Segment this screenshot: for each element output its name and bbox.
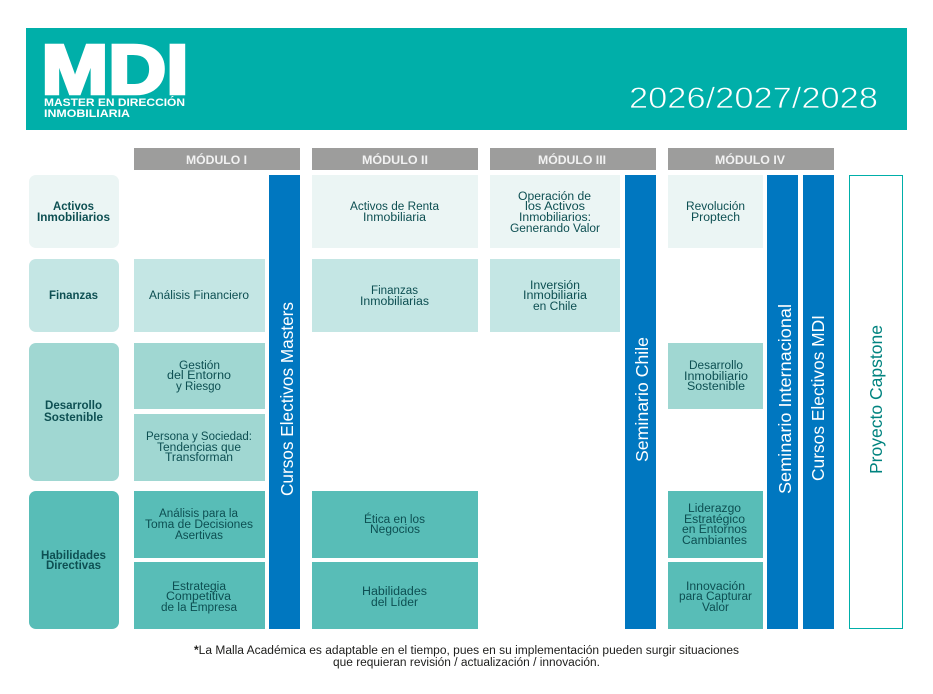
header banner bbox=[26, 28, 907, 130]
row label: Habilidades Directivas: Directivas bbox=[46, 560, 101, 572]
course: Revolución Proptech bbox=[668, 175, 763, 248]
course: Desarrollo Inmobiliario Sostenible: Sostenible bbox=[687, 381, 745, 393]
course: Habilidades del Líder: Habilidades bbox=[362, 586, 427, 598]
course: Operación de los Activos Inmobiliarios: Generando Valor bbox=[510, 223, 600, 235]
vertical bar: Cursos Electivos Masters: Cursos Electivos Masters bbox=[277, 302, 297, 496]
course: Revolución Proptech: Revolución bbox=[686, 201, 745, 213]
course: Operación de los Activos Inmobiliarios: los Activos bbox=[525, 201, 585, 213]
course: Inversión Inmobiliaria en Chile: Inmobiliaria bbox=[523, 290, 588, 302]
vertical bar: Seminario Internacional bbox=[767, 175, 798, 629]
course: Persona y Sociedad bbox=[134, 414, 265, 481]
logo: MDI Master en Dirección Inmobiliaria: MDI bbox=[42, 30, 188, 108]
logo: MDI Master en Dirección Inmobiliaria: INMOBILIARIA bbox=[44, 108, 130, 120]
module header: Módulo IV: MÓDULO IV bbox=[715, 154, 785, 167]
course: Habilidades del Líder bbox=[312, 562, 478, 629]
module I column bbox=[134, 175, 300, 629]
course: Análisis para la Toma de Decisiones Asertivas bbox=[134, 491, 265, 558]
course: Innovación para Capturar Valor: Innovación bbox=[686, 581, 745, 593]
course: Liderazgo Estratégico en Entornos Cambiantes: Estratégico bbox=[684, 514, 745, 526]
row label: Habilidades Directivas bbox=[29, 491, 119, 629]
course: Desarrollo Inmobiliario Sostenible: Desarrollo bbox=[689, 360, 743, 372]
course: Liderazgo Estratégico en Entornos Cambiantes: en Entornos bbox=[682, 524, 747, 536]
course: Análisis para la Toma de Decisiones Asertivas: Análisis para la bbox=[159, 508, 239, 520]
row label: Habilidades Directivas: Habilidades bbox=[41, 550, 106, 562]
course: Persona y Sociedad: Persona y Sociedad: bbox=[146, 431, 252, 443]
course: Ética en los Negocios: Ética en los bbox=[364, 513, 425, 526]
course: Gestión del Entorno y Riesgo: Gestión bbox=[179, 360, 220, 372]
module IV column bbox=[668, 175, 834, 629]
module header: Módulo III: MÓDULO III bbox=[538, 154, 606, 167]
course: Análisis Financiero bbox=[134, 259, 265, 332]
course: Análisis para la Toma de Decisiones Asertivas: Asertivas bbox=[175, 530, 223, 542]
course: Finanzas Inmobiliarias bbox=[312, 259, 478, 332]
course: Finanzas Inmobiliarias: Inmobiliarias bbox=[360, 296, 429, 308]
row label: Activos Inmobiliarios bbox=[29, 175, 119, 248]
course: Gestión del Entorno y Riesgo: y Riesgo bbox=[176, 381, 221, 393]
course: Activos de Renta Inmobiliaria: Activos de Renta bbox=[350, 201, 440, 213]
course: Desarrollo Inmobiliario Sostenible bbox=[668, 343, 763, 409]
module header: Módulo I bbox=[134, 148, 300, 170]
module II column bbox=[312, 175, 478, 629]
footnote bbox=[194, 645, 739, 669]
course: Estrategia Competitiva de la Empresa bbox=[134, 562, 265, 629]
course: Liderazgo Estratégico en Entornos Cambiantes bbox=[668, 491, 763, 558]
module header: Módulo IV bbox=[668, 148, 834, 170]
course: Estrategia Competitiva de la Empresa: Competitiva bbox=[166, 591, 232, 603]
course: Operación de los Activos Inmobiliarios: Operación de bbox=[518, 191, 591, 203]
row label: Desarrollo Sostenible bbox=[29, 343, 119, 481]
outlined column: Proyecto Capstone bbox=[850, 176, 902, 628]
course: Liderazgo Estratégico en Entornos Cambiantes: Cambiantes bbox=[682, 535, 747, 547]
vertical bar: Seminario Chile bbox=[625, 175, 656, 629]
course: Activos de Renta Inmobiliaria: Inmobiliaria bbox=[363, 212, 427, 224]
course: Inversión Inmobiliaria en Chile: Inversión bbox=[530, 280, 580, 292]
module III column bbox=[490, 175, 656, 629]
course: Estrategia Competitiva de la Empresa: de la Empresa bbox=[161, 602, 238, 614]
course: Análisis para la Toma de Decisiones Asertivas: Toma de Decisiones bbox=[145, 519, 253, 531]
vertical bar: Cursos Electivos MDI bbox=[803, 175, 834, 629]
row label: Desarrollo Sostenible: Desarrollo bbox=[45, 400, 102, 412]
course: Inversión Inmobiliaria en Chile bbox=[490, 259, 620, 332]
course: Innovación para Capturar Valor: Valor bbox=[702, 602, 729, 614]
course: Análisis Financiero: Análisis Financiero bbox=[149, 290, 249, 302]
course: Persona y Sociedad: Tendencias que bbox=[157, 442, 241, 454]
logo: MDI Master en Dirección Inmobiliaria: MASTER EN DIRECCIÓN bbox=[44, 96, 185, 109]
course: Persona y Sociedad: Transforman bbox=[165, 452, 233, 464]
module header: Módulo II bbox=[312, 148, 478, 170]
row label: Desarrollo Sostenible: Sostenible bbox=[44, 412, 103, 424]
course: Gestión del Entorno y Riesgo: del Entorno bbox=[167, 370, 231, 382]
course: Ética en los Negocios bbox=[312, 491, 478, 558]
outlined column: Proyecto Capstone: Proyecto Capstone bbox=[866, 325, 886, 474]
module header: Módulo III bbox=[490, 148, 656, 170]
module header: Módulo I: MÓDULO I bbox=[186, 154, 247, 167]
row label: Finanzas bbox=[29, 259, 119, 332]
course: Operación de los Activos Inmobiliarios: Inmobiliarios: bbox=[519, 212, 591, 224]
course: Activos de Renta Inmobiliaria bbox=[312, 175, 478, 248]
course: Finanzas Inmobiliarias: Finanzas bbox=[371, 285, 418, 297]
footnote: *La Malla Académica es adaptable en el tiempo, pues en su implementación pueden surgir situaciones bbox=[194, 645, 739, 657]
row label: Activos Inmobiliarios: Activos bbox=[53, 201, 94, 213]
course: Gestión del Entorno y Riesgo bbox=[134, 343, 265, 409]
course: Desarrollo Inmobiliario Sostenible: Inmobiliario bbox=[684, 371, 748, 383]
vertical bar: Cursos Electivos MDI: Cursos Electivos MDI bbox=[808, 315, 828, 481]
course: Inversión Inmobiliaria en Chile: en Chile bbox=[533, 301, 577, 313]
row label: Activos Inmobiliarios: Inmobiliarios bbox=[37, 212, 110, 224]
course: Habilidades del Líder: del Líder bbox=[371, 597, 418, 609]
course: Operación de los Activos Inmobiliarios bbox=[490, 175, 620, 248]
footnote: que requieran revisión / actualización / innovación. bbox=[333, 657, 600, 669]
course: Liderazgo Estratégico en Entornos Cambiantes: Liderazgo bbox=[688, 503, 741, 515]
vertical bar: Seminario Chile: Seminario Chile bbox=[632, 337, 652, 462]
course: Innovación para Capturar Valor bbox=[668, 562, 763, 629]
module header: Módulo II: MÓDULO II bbox=[362, 154, 428, 167]
vertical bar: Cursos Electivos Masters bbox=[269, 175, 300, 629]
course: Innovación para Capturar Valor: para Capturar bbox=[679, 591, 752, 603]
course: Ética en los Negocios: Negocios bbox=[370, 524, 420, 536]
vertical bar: Seminario Internacional: Seminario Internacional bbox=[775, 304, 795, 494]
course: Revolución Proptech: Proptech bbox=[691, 212, 740, 224]
row label: Finanzas: Finanzas bbox=[49, 290, 98, 302]
course: Estrategia Competitiva de la Empresa: Estrategia bbox=[172, 581, 227, 593]
years heading: 2026/2027/2028 bbox=[629, 82, 878, 115]
